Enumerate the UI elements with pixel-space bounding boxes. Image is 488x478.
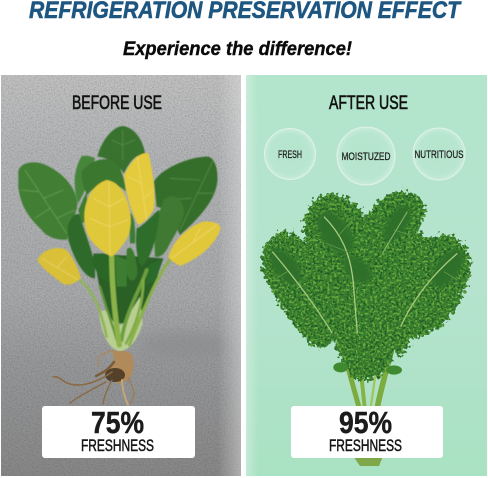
freshness card 95%	[291, 405, 443, 458]
bubble: moistuzed: MOISTUZED	[342, 151, 391, 163]
dark leaf mass behind stems	[93, 253, 163, 323]
kale flat leaf blades	[264, 200, 470, 292]
panel background: grey concrete	[1, 75, 241, 476]
leaf: yellow right	[168, 222, 221, 266]
stem ends below card	[353, 456, 383, 466]
stem base	[99, 297, 143, 351]
value 75%: 75%	[91, 405, 144, 440]
illustration: curly kale	[262, 192, 470, 407]
kale ruffles beside stems	[333, 362, 402, 375]
stems	[80, 253, 170, 345]
heading: after use: AFTER USE	[329, 93, 408, 114]
bubble: nutritious	[413, 128, 465, 180]
heading: before use: BEFORE USE	[72, 93, 162, 114]
kale midribs	[272, 212, 457, 333]
leaf: large left green	[18, 162, 77, 240]
bubble: moistuzed	[337, 127, 395, 185]
bubble: nutritious: NUTRITIOUS	[414, 149, 464, 161]
panel: after use	[246, 75, 487, 476]
value 95%: 95%	[339, 405, 392, 440]
leaf: yellow top	[124, 153, 154, 225]
illustration: spinach with yellowing leaves	[18, 126, 221, 351]
leaf: top back green	[97, 126, 145, 173]
leaf: behind left	[75, 156, 95, 203]
freshness card 75%	[42, 405, 195, 458]
leaf: large right green	[154, 157, 218, 235]
subtitle: Experience the difference!	[123, 38, 352, 60]
bubble: fresh	[264, 128, 316, 180]
bubble: fresh: FRESH	[278, 149, 302, 161]
leaf: yellow left	[37, 248, 81, 285]
panel background: mint	[246, 75, 487, 476]
label freshness: FRESHNESS	[329, 437, 402, 455]
leaf: centre green cluster	[68, 159, 184, 287]
illustration: roots	[53, 351, 134, 405]
leaf: yellow large centre	[84, 180, 131, 257]
label freshness: FRESHNESS	[81, 437, 154, 455]
kale stems	[344, 353, 391, 407]
panel: before use	[1, 75, 241, 476]
kale silhouette with curly edge	[262, 192, 470, 380]
